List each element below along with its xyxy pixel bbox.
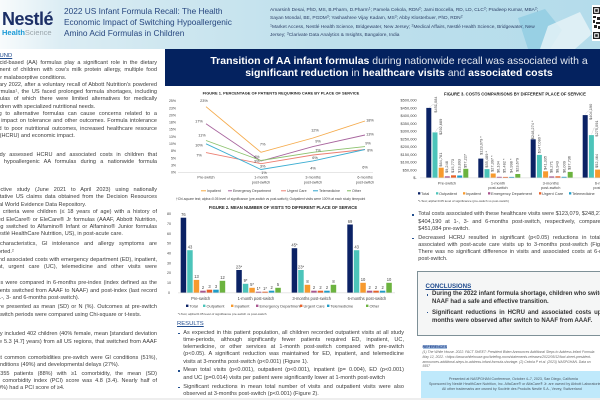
legend: Emergency Department [233,189,271,193]
data labels: 17% [195,118,203,124]
references list: 5557 [422,364,430,368]
data labels: 4% [254,154,260,159]
authors and affiliations: Sayan Mondal, BE, PGDM3; Yashashree Vijay Kadam, MS3; Abby Klosterbuer, PhD, RDN2 [270,14,463,21]
text: statistics [0,304,157,318]
text: patient characteristics [0,241,157,255]
bar value labels: 43 [354,244,360,250]
bullet: total costs: $451,084 pre-switch. [418,226,470,232]
x axis labels: post-switch [252,180,270,184]
bar value labels: $8,271 [548,161,553,173]
bullet 3: observed at 3-months post-switch (p<0.001) (Figure 2). [183,391,319,397]
y axis labels [169,99,176,174]
figure 3 title: FIGURE 3. COSTS COMPARISONS BY DIFFERENT PLACE OF SERVICE [444,91,586,96]
bar value labels: 23* [298,264,304,269]
y axis labels: 50 [167,242,171,246]
x axis labels: Pre-switch [191,296,211,301]
bar value labels: $123,079 * [478,136,483,155]
data labels: 3% [254,158,260,164]
bar value labels: 8 [332,279,335,284]
3-months bars [292,248,336,293]
pre-switch bars [181,218,225,293]
series: emergency department [206,124,365,161]
data labels: 23% [200,98,208,103]
6-months bars [347,224,392,293]
bar value labels: $13,893 [456,159,461,173]
conclusion bullet 1 [427,290,600,305]
logo: Nestle Health Science: Nestlé [2,9,53,29]
figure 1 title: FIGURE 1. PERCENTAGE OF PATIENTS REQUIRING CARE BY PLACE OF SERVICE [203,90,360,95]
data labels: 12% [311,128,319,132]
x axis labels: Pre-switch [197,176,215,180]
references list: announces-additional-steps-to-address-infant-formula-shortage. (2) Cekola P et al. (2023) NASPGHAN. Data on [422,360,591,364]
references list: (1) The White House. 2022. FACT SHEET: President Biden Announces Additional Steps to Address Infant Formula [422,350,594,354]
bar value labels: $23,679 [515,158,520,172]
y axis labels: 70 [167,222,171,226]
conclusion bullet 2: months were observed after switch to NAAF from AAAF. [432,318,592,324]
legend: Inpatient [466,191,482,196]
y axis labels: $500,000 [400,98,418,103]
references heading: REFERENCES [422,345,447,349]
bullet 1: telemedicine, or other services at 1-month post-switch compared with pre-switch [183,344,404,350]
panel: left text column [0,52,157,391]
legend: Inpatient [207,189,221,193]
bar value labels: $8,943 [555,161,560,173]
bar value labels: 8 [306,279,309,284]
y axis labels: 23% [169,106,176,110]
bullet 2 [178,367,404,381]
y axis labels: 5% [171,156,176,160]
pre-switch cost bars [426,108,468,178]
legend: Other [370,303,380,308]
x axis labels [197,176,374,184]
bullet 1: As expected in this patient population, all children recorded outpatient visits at all study [183,330,404,336]
x axis labels: 1-month [254,176,268,180]
x axis labels: Pre-switch [438,180,456,185]
legend [201,189,362,193]
data labels: 4% [310,166,316,170]
legend [418,191,595,196]
bar value labels: 2 [326,285,329,290]
text: methods design [0,187,157,208]
bullet 2: and UC (p=0.014) visits per patient were significantly lower at 1-month post-switch [183,375,385,381]
poster title: 2022 US Infant Formula Recall: The Health [64,6,222,16]
text: study population [0,331,157,345]
authors and affiliations: Amarsinh Desai, PhD, MS, B.Pharm, D.Pharm1; Pamela Cekola, RDN2; Jami Boccella, RD, LD, CLC2; Pradeep Kumar, MBA2; [270,6,538,13]
bar value labels: $15,773 [450,159,455,173]
6-months cost bars [583,115,600,178]
footnote: *t-Test; alpha=0.05 level of significance (pre-switch vs post-switch) [418,199,509,203]
bar value labels: $147,080 * [536,134,541,153]
y axis labels: 18% [169,121,176,125]
y axis labels: 20% [169,114,176,118]
data labels: 6% [362,164,368,170]
bar value labels: $57,227 [462,154,467,168]
bar value labels: $404,190 [588,103,593,120]
series: other [206,140,365,160]
y axis labels: $250,000 [400,136,418,141]
bullet 1: time-periods, although significantly fewer patients required ED, inpatient, UC, [183,337,404,343]
bar value labels: $248,274 * [530,120,535,139]
text: comparison periods [0,280,157,301]
bar value labels: 2 [375,285,378,290]
chart: figure 3 cost bar chart [400,91,600,203]
x axis labels: 1-month [491,180,505,185]
presentation note box [421,371,600,398]
y axis labels: $100,000 [400,160,418,165]
bar value labels: $9,248 [444,161,449,173]
x axis labels: 6-months [357,176,373,180]
legend [186,303,380,308]
bullet 1 [178,330,404,365]
y axis labels: $150,000 [400,152,418,157]
data labels: 1% [261,170,267,175]
y axis labels: 15% [169,128,176,132]
legend: Outpatient [206,303,225,308]
chart: figure 2 bar chart [167,205,395,316]
bar value labels: 3 [215,284,218,289]
bar value labels: 5* [250,282,254,287]
y axis labels: 10 [167,281,171,285]
bar value labels: 69 [348,219,353,224]
key message banner: significant reduction in healthcare visits and associated costs [245,67,553,79]
y axis labels: 30 [167,261,171,265]
x axis labels: post-switch [356,180,374,184]
bar value labels: $55,489 * [484,151,489,168]
heading: results: RESULTS [177,321,204,327]
legend: Telemedicine [330,303,353,308]
series: telemedicine [206,144,365,170]
y axis labels: 8% [171,149,176,153]
legend: Total [421,191,429,196]
y axis labels: $50,000 [403,167,418,172]
heading: conclusions: CONCLUSIONS [426,282,471,290]
text: outcomes [0,257,157,270]
poster title [64,6,232,38]
references [422,345,594,368]
bullet: decreased HCRU: post-switch. [418,256,448,262]
bar value labels: 3 [208,284,211,289]
x axis labels [191,296,387,301]
bar value labels [181,212,392,291]
bar value labels: 43 [188,244,193,250]
sponsor line: Sponsored by Nestlé HealthCare Nutrition, Inc. AlfaCare® or AlfaCare® Jr. are owned by Abbott Laboratories. [429,382,600,386]
y axis labels: 40 [167,252,171,256]
decorative shapes [518,9,592,49]
y axis labels: 60 [167,232,171,236]
x axis labels: 3-months post-switch [292,296,332,301]
data labels: 13% [366,132,374,136]
data labels [195,98,374,175]
bar value labels: 2 [313,285,316,290]
bar value labels: 2 [270,285,273,290]
bar value labels: $275,091 [594,120,599,137]
conference line: Presented at NASPGHAN Conference, October 4–7, 2023, San Diego, California [449,376,578,380]
x axis labels: 3-months [543,180,559,185]
y axis labels [400,98,418,180]
x axis labels: post-switch [488,185,508,190]
data labels: 8% [367,148,373,152]
data labels: 18% [366,118,374,122]
bar value labels: 13 [194,274,199,279]
poster title: Amino Acid Formulas in Children [64,28,184,38]
bullet 3: Significant reductions in mean total number of visits and outpatient visits were also [183,384,404,390]
bar value labels: 1* [263,286,267,291]
y axis labels: $400,000 [400,113,418,118]
header band [0,0,600,49]
data labels: 3% [260,164,266,168]
y axis labels: 25% [169,99,176,103]
trademark line: All other trademarks are owned by Société des Produits Nestlé S.A., Vevey, Switzerland [442,387,582,391]
authors and affiliations: Jersey; 3Clarivate Data Analytics & Insights, Bangalore, India [270,31,399,38]
legend: Emergency Department [491,191,533,196]
bar value labels: 76 [181,212,186,217]
y axis labels: $300,000 [400,129,418,134]
bar value labels: 2 [202,285,205,290]
x axis labels: 1-month post-switch [238,296,275,301]
panel: conclusions [417,271,600,336]
legend: Telemedicine [319,189,340,193]
data labels: 7% [196,152,202,158]
legend: Emergency Department [260,303,302,308]
y axis labels: $350,000 [400,121,418,126]
bar value labels: $451,084 [433,96,438,113]
panel: results text [177,321,404,397]
bar value labels: $292,689 [438,119,443,135]
legend: Inpatient [234,303,250,308]
y axis labels: $- [413,175,417,180]
bottom strip [0,398,600,400]
bar value labels: 9* [244,278,248,283]
series: urgent care [206,150,365,164]
bullet 1: (p<0.05). A significant reduction was maintained for ED, inpatient, and telemedicine [183,351,404,357]
bar value labels: $4,998 * [508,158,513,173]
x axis labels: post-switch [304,180,322,184]
bar value labels: $64,781 [438,153,443,167]
data labels: 9% [365,140,371,146]
legend: Urgent Care [304,303,325,308]
x axis labels: post-switch [541,185,560,190]
bar value labels: 10 [361,277,366,282]
1-month cost bars [478,159,520,178]
figure 2 title: FIGURE 2. MEAN NUMBER OF VISITS TO DIFFERENT PLACE OF SERVICE [209,205,357,210]
bullet: total costs [412,211,600,232]
footnote: *t-Test; alpha=0.05 level of significance pre-switch vs post-switch [178,312,267,316]
bullet: decreased HCRU [412,235,600,262]
bar value labels: $37,736 [567,156,572,170]
bullet 3 [178,384,404,397]
x axis labels: 6-months post-switch [348,296,387,301]
bar value labels: 12 [220,275,225,280]
authors and affiliations: 1Market Access, Nestlé Health Science, Bridgewater, New Jersey; 2Medical Affairs, Nestlé Health Science, Bridgewater, New [270,23,535,30]
legend: Other [352,189,362,193]
data labels: 7% [315,148,321,152]
bar value labels: 2 [319,285,322,290]
y axis labels: $200,000 [400,144,418,149]
references list [422,350,594,368]
bullet 1: visits at 3-months post-switch (p<0.001) (Figure 1). [183,359,308,365]
y axis labels: 10% [169,142,176,146]
footnote: †Chi-square test; alpha=0.05 level of significance (pre-switch vs post-switch); Outpatient visits were 100% at each study timepoint [176,197,365,201]
conclusion bullet 1: NAAF had a safe and effective transition. [432,299,549,305]
bar value labels: 2 [368,285,371,290]
y axis labels [167,212,171,295]
bar value labels: 45* [291,242,298,248]
data labels: 10% [195,142,203,148]
bar value labels: 10 [387,277,392,282]
bar value labels: 23* [236,264,242,269]
chart: figure 1 line chart [169,90,374,201]
text: comorbidity index [0,371,157,391]
authors and affiliations [270,6,538,38]
key message banner [165,49,600,86]
bar value labels: $6,009 [561,161,566,173]
bar value labels: 5 [277,282,280,287]
data labels: 7% [260,142,266,146]
legend: Urgent Care [542,191,563,196]
data labels: 6% [312,155,318,160]
poster title: Economic Impact of Switching Hypoallergenic [64,17,232,27]
y axis labels: 20 [167,271,171,275]
bar value labels: $41,335 [542,156,547,170]
1-month bars [236,270,281,293]
bar value labels: $52,464 [594,153,599,168]
y axis labels: 0% [171,170,176,174]
data labels: 9% [315,138,321,144]
legend: Telemedicine [572,191,595,196]
bar value labels: 2 [381,285,384,290]
y axis labels: 13% [169,135,176,139]
data labels: 11% [198,132,206,138]
text: background [0,60,157,139]
bar value labels: 1* [257,286,261,291]
conclusion bullet 2 [427,310,600,324]
references list: May 12, 2022. <https://www.whitehouse.gov/briefing-room/statements-releases/2022/05/12/fact-sheet-president- [422,355,591,359]
bar value labels: $5,482 * [502,158,507,173]
y axis labels: $450,000 [400,105,418,110]
legend: Urgent Care [287,189,307,193]
bar value labels [433,96,599,173]
bar value labels: $6,104 [496,160,501,173]
key message banner: Transition of AA infant formulas during nationwide recall was associated with a [210,54,588,66]
3-months cost bars [531,139,573,178]
y axis labels: 80 [167,212,171,216]
text: comorbidities [0,355,157,368]
leader lines [429,104,596,134]
x axis labels [438,180,600,190]
logo: Nestle Health Science: HealthScience [2,28,52,37]
x axis labels: 3-months [305,176,321,180]
legend: Outpatient [439,191,458,196]
text: objective [0,152,157,165]
y axis labels: 3% [171,163,176,167]
y axis labels: 0 [168,291,170,295]
legend: Total [190,303,198,308]
QR code [592,5,600,41]
series: inpatient [206,107,365,152]
text: inclusion criteria [0,209,157,237]
panel: cost findings text [412,211,600,262]
bar value labels: $27,397 * [490,155,495,172]
bullet 2: Mean total visits (p<0.001), outpatient (p<0.001), inpatient (p= 0.004), ED (p<0.001) [183,367,404,373]
